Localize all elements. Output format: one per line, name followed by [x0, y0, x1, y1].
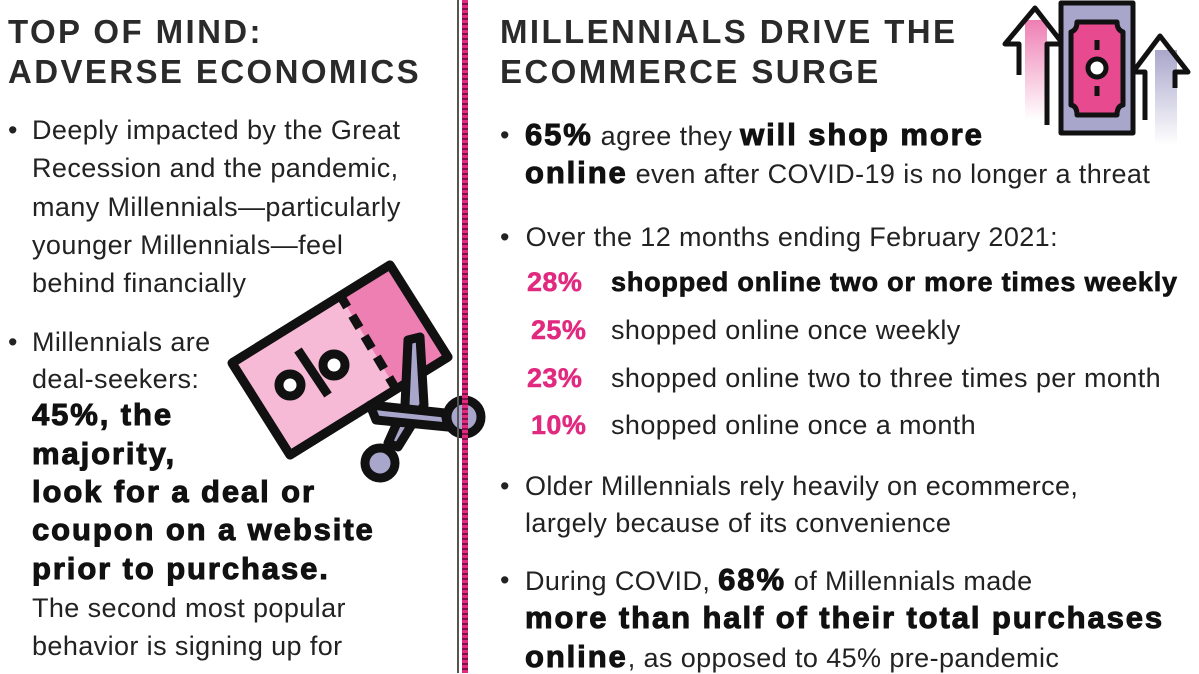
- text block: bullet 1 left: behind financially: [32, 268, 246, 298]
- text block: bullet 2 left: behavior is signing up for: [32, 631, 343, 661]
- stats list: 25%: [531, 315, 586, 345]
- text block: older millennials: •: [500, 471, 510, 501]
- text block: 65% bullet: 65% agree they will shop more: [525, 117, 984, 152]
- text block: 12 months bullet: • Over the 12 months ending February 2021:: [500, 222, 1058, 252]
- text block: bullet 1 left: Recession and the pandemic,: [32, 153, 399, 183]
- text block: during covid: online, as opposed to 45% pre-pandemic: [525, 639, 1059, 674]
- text block: bullet 2 left: •: [8, 327, 18, 357]
- stats list: shopped online two or more times weekly: [611, 267, 1178, 297]
- stats list: shopped online once weekly: [611, 315, 961, 345]
- heading: left: [8, 13, 421, 90]
- text block: during covid: During COVID, 68% of Millennials made: [525, 562, 1033, 597]
- icon: coupon with scissors: [228, 260, 486, 482]
- stats list: shopped online two to three times per month: [611, 363, 1161, 393]
- text block: 65% bullet: [500, 117, 1150, 190]
- icon: money with up arrows: [1002, 0, 1190, 136]
- stats list: 10%: [531, 410, 586, 440]
- text block: bullet 2 left: The second most popular: [32, 593, 346, 623]
- text block: bullet 2 left: prior to purchase.: [32, 551, 330, 586]
- heading: right: [500, 13, 957, 90]
- text block: bullet 1 left: [8, 115, 401, 298]
- text block: bullet 1 left: Deeply impacted by the Great: [32, 115, 400, 145]
- text block: bullet 2 left: coupon on a website: [32, 512, 375, 547]
- stats list: 28%: [527, 267, 582, 297]
- text block: 65% bullet: online even after COVID-19 is no longer a threat: [525, 155, 1150, 190]
- text block: bullet 1 left: many Millennials—particularly: [32, 192, 401, 222]
- stats list: 23%: [527, 363, 582, 393]
- text block: bullet 2 left: look for a deal or: [32, 474, 316, 509]
- text block: bullet 1 left: •: [8, 115, 18, 145]
- text block: older millennials: Older Millennials rely heavily on ecommerce,: [525, 471, 1078, 501]
- text block: during covid: •: [500, 565, 510, 595]
- heading: right: MILLENNIALS DRIVE THE: [500, 13, 957, 50]
- heading: left: ADVERSE ECONOMICS: [8, 53, 421, 90]
- text block: 65% bullet: •: [500, 120, 510, 150]
- text block: bullet 2 left: majority,: [32, 436, 176, 471]
- heading: right: ECOMMERCE SURGE: [500, 53, 881, 90]
- text block: bullet 2 left: [8, 327, 375, 661]
- text block: bullet 1 left: younger Millennials—feel: [32, 230, 343, 260]
- stats list: [527, 267, 1178, 440]
- text block: during covid: more than half of their total purchases: [525, 600, 1164, 635]
- text block: during covid: [500, 562, 1164, 674]
- text block: older millennials: [500, 471, 1078, 538]
- text block: bullet 2 left: deal-seekers:: [32, 364, 199, 394]
- text block: bullet 2 left: 45%, the: [32, 397, 173, 432]
- heading: left: TOP OF MIND:: [8, 13, 263, 50]
- text block: bullet 2 left: Millennials are: [32, 327, 211, 357]
- text block: older millennials: largely because of its convenience: [525, 508, 951, 538]
- stats list: shopped online once a month: [611, 410, 976, 440]
- divider: [457, 0, 459, 673]
